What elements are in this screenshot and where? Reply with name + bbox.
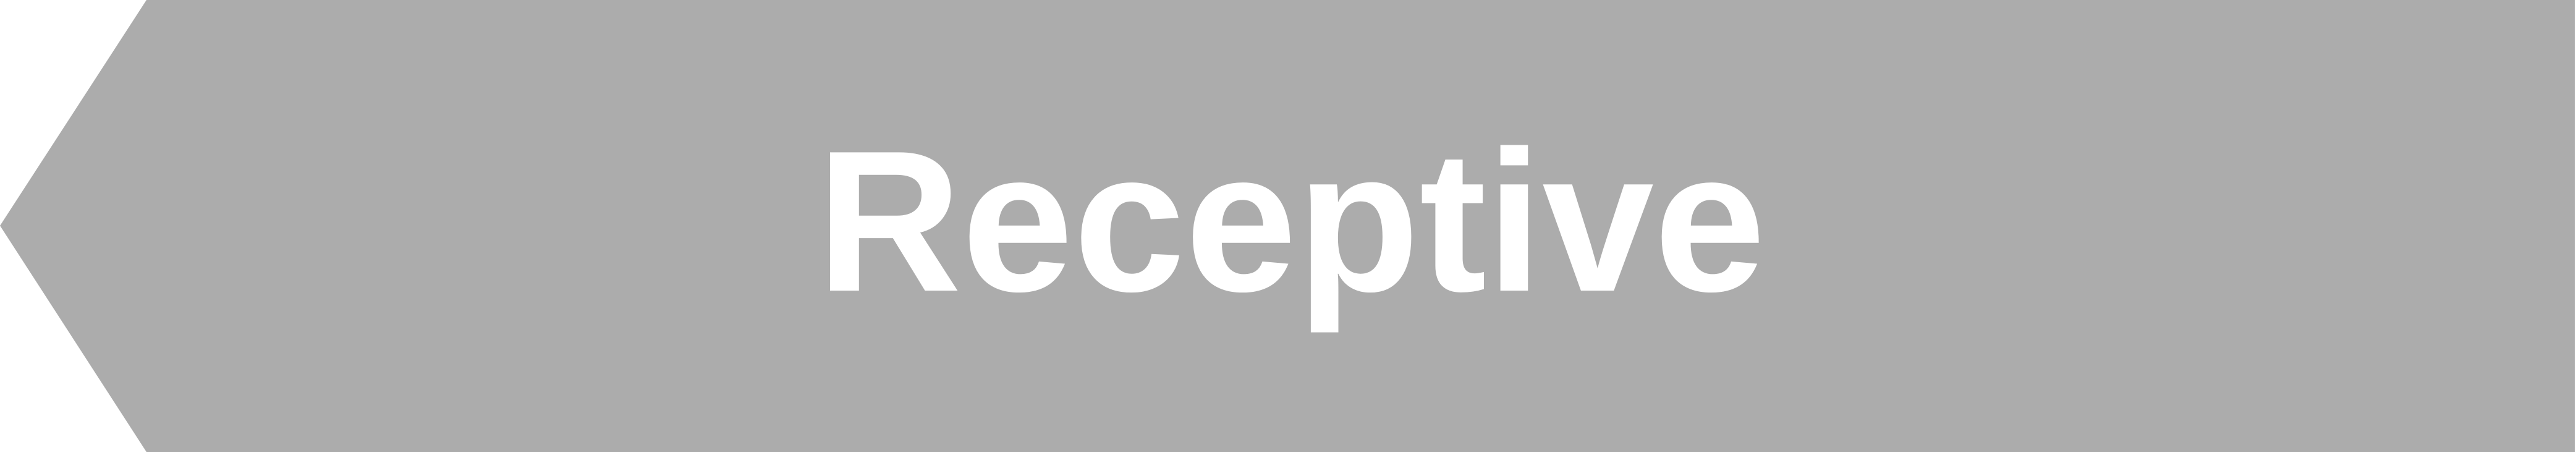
heading: Receptive: Receptive [816, 109, 1766, 335]
